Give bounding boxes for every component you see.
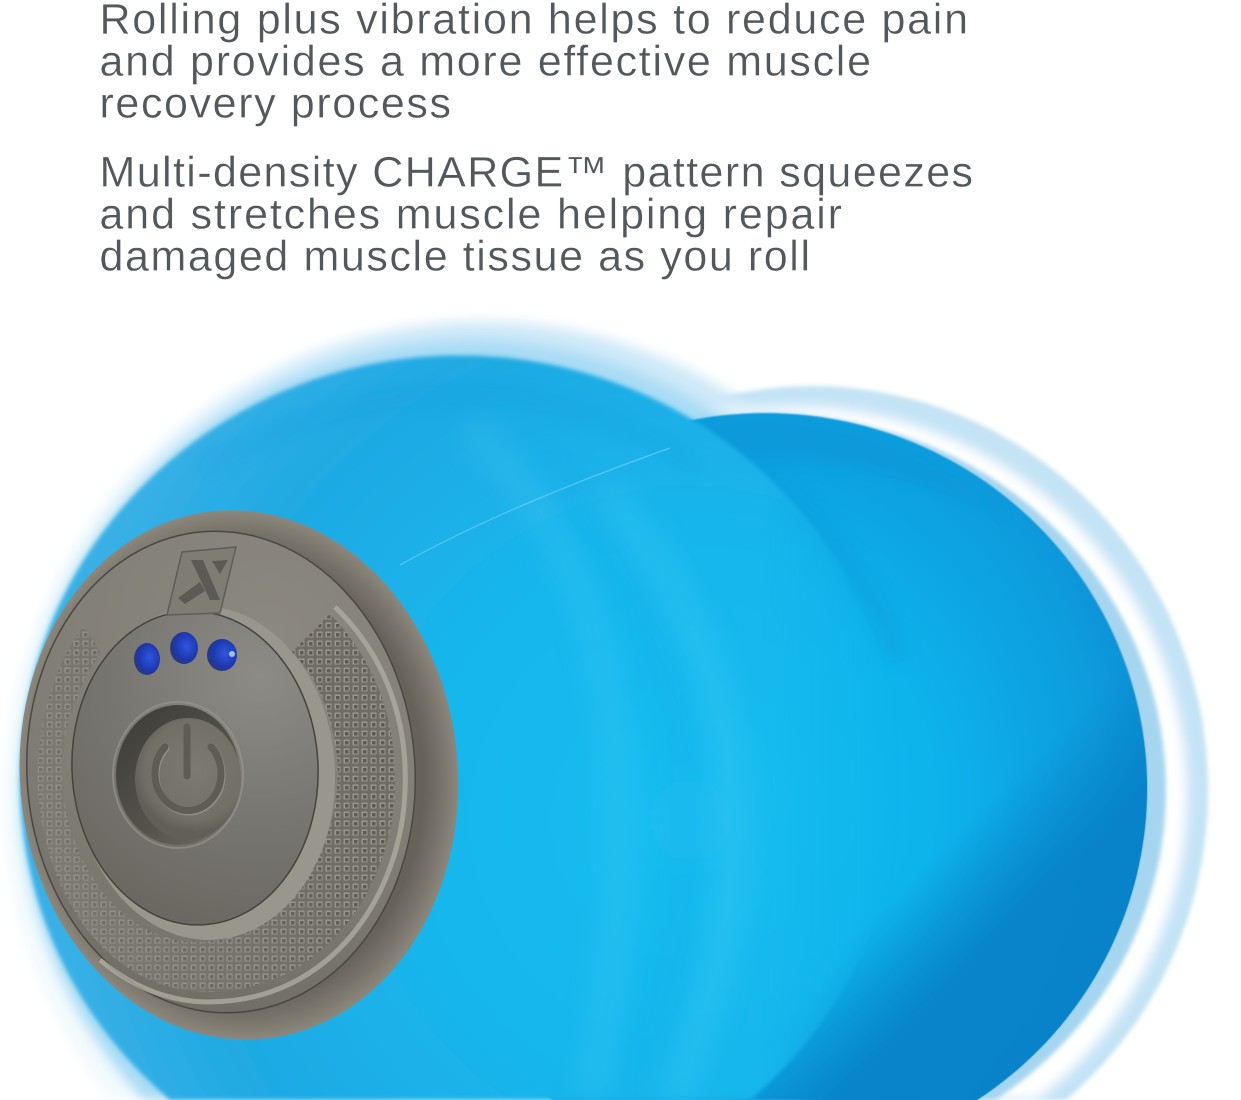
text block: rolling benefit: and provides a more effective muscle bbox=[100, 38, 871, 86]
soft concentric motion bands bbox=[200, 395, 733, 1100]
text block: multi-density pattern benefit bbox=[100, 148, 973, 280]
text block: rolling benefit: recovery process bbox=[100, 80, 451, 128]
cap face bbox=[11, 518, 431, 1026]
logo badge bbox=[167, 547, 236, 615]
inner disc bbox=[64, 605, 326, 931]
textured grip band bbox=[38, 614, 395, 992]
control cap bbox=[0, 492, 480, 1058]
right lobe of roller bbox=[383, 413, 1147, 1100]
cap outer rim bbox=[0, 492, 480, 1058]
product: vibrating blue roller with motion blur bbox=[0, 321, 1208, 1100]
text block: multi-density pattern benefit: damaged muscle tissue as you roll bbox=[100, 232, 810, 280]
text block: multi-density pattern benefit: Multi-density CHARGE™ pattern squeezes bbox=[100, 148, 973, 196]
text block: multi-density pattern benefit: and stretches muscle helping repair bbox=[100, 190, 842, 238]
inner disc lip bbox=[66, 599, 344, 947]
text block: rolling benefit bbox=[100, 0, 968, 128]
motion halo bbox=[4, 321, 1208, 1100]
left lobe of roller bbox=[20, 355, 900, 1100]
outer highlight ring bbox=[100, 607, 405, 1002]
power button bbox=[113, 702, 243, 848]
LED indicators bbox=[134, 632, 237, 675]
